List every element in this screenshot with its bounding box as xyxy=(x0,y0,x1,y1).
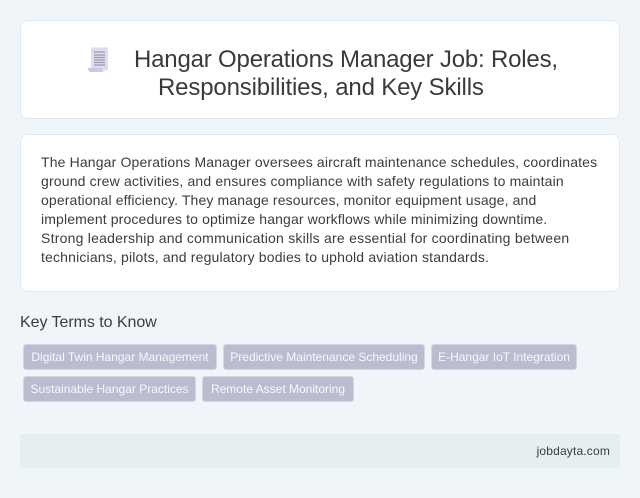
tag: Digital Twin Hangar Management xyxy=(31,350,209,364)
description text: operational efficiency. They manage resources, monitor equipment usage, and xyxy=(41,192,536,208)
tag xyxy=(23,376,196,402)
tag list xyxy=(23,344,577,402)
footer bar xyxy=(20,434,620,468)
footer source: jobdayta.com xyxy=(537,444,610,458)
description text xyxy=(41,154,597,265)
description text: technicians, pilots, and regulatory bodies to uphold aviation standards. xyxy=(41,249,489,265)
tag xyxy=(202,376,354,402)
panel: title card xyxy=(20,20,620,119)
tag: Remote Asset Monitoring xyxy=(211,382,345,396)
icon: document xyxy=(88,47,108,72)
tag xyxy=(431,344,577,370)
tag xyxy=(23,344,217,370)
heading line 2: Responsibilities, and Key Skills xyxy=(158,74,484,101)
description text: implement procedures to optimize hangar workflows while minimizing downtime. xyxy=(41,211,547,227)
heading: key terms: Key Terms to Know xyxy=(20,314,157,331)
tag xyxy=(223,344,425,370)
panel: description card xyxy=(20,134,620,292)
description text: Strong leadership and communication skills are essential for coordinating between xyxy=(41,230,569,246)
tag: E-Hangar IoT Integration xyxy=(438,350,570,364)
description text: The Hangar Operations Manager oversees aircraft maintenance schedules, coordinates xyxy=(41,154,597,170)
description text: ground crew activities, and ensures compliance with safety regulations to maintain xyxy=(41,173,564,189)
tag: Sustainable Hangar Practices xyxy=(30,382,189,396)
heading line 1: Hangar Operations Manager Job: Roles, xyxy=(134,46,558,73)
tag: Predictive Maintenance Scheduling xyxy=(230,350,418,364)
